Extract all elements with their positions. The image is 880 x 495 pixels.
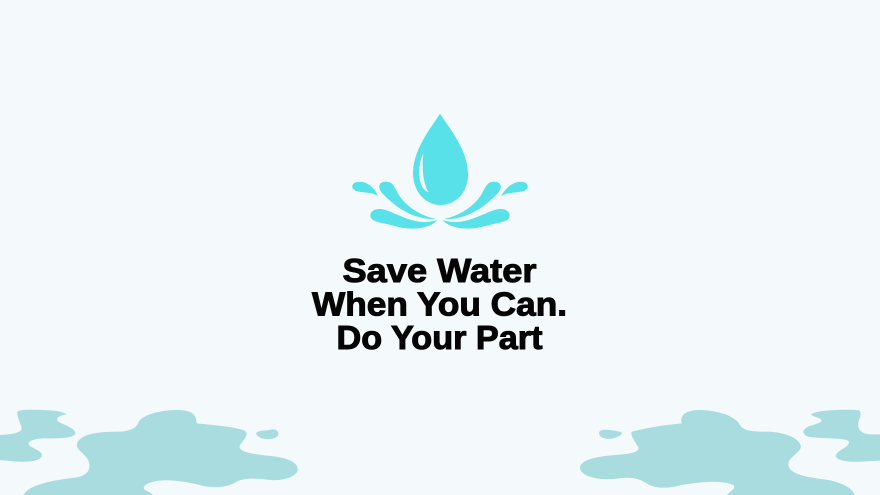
splash: right lower xyxy=(443,209,510,229)
drop highlight xyxy=(419,153,429,192)
splash: left inner xyxy=(379,182,436,219)
splash: left lower xyxy=(370,209,437,229)
title xyxy=(312,252,567,356)
splash: left outer xyxy=(352,182,378,196)
puddle: bottom right xyxy=(580,410,880,495)
icon: water drop with splash xyxy=(352,114,528,229)
water drop xyxy=(413,114,468,205)
title: Save Water xyxy=(342,252,537,289)
splash: right outer xyxy=(501,182,528,196)
splash: right inner xyxy=(444,182,501,219)
title: When You Can. xyxy=(312,286,567,322)
title: Do Your Part xyxy=(336,319,542,356)
puddle: bottom left xyxy=(0,410,298,495)
